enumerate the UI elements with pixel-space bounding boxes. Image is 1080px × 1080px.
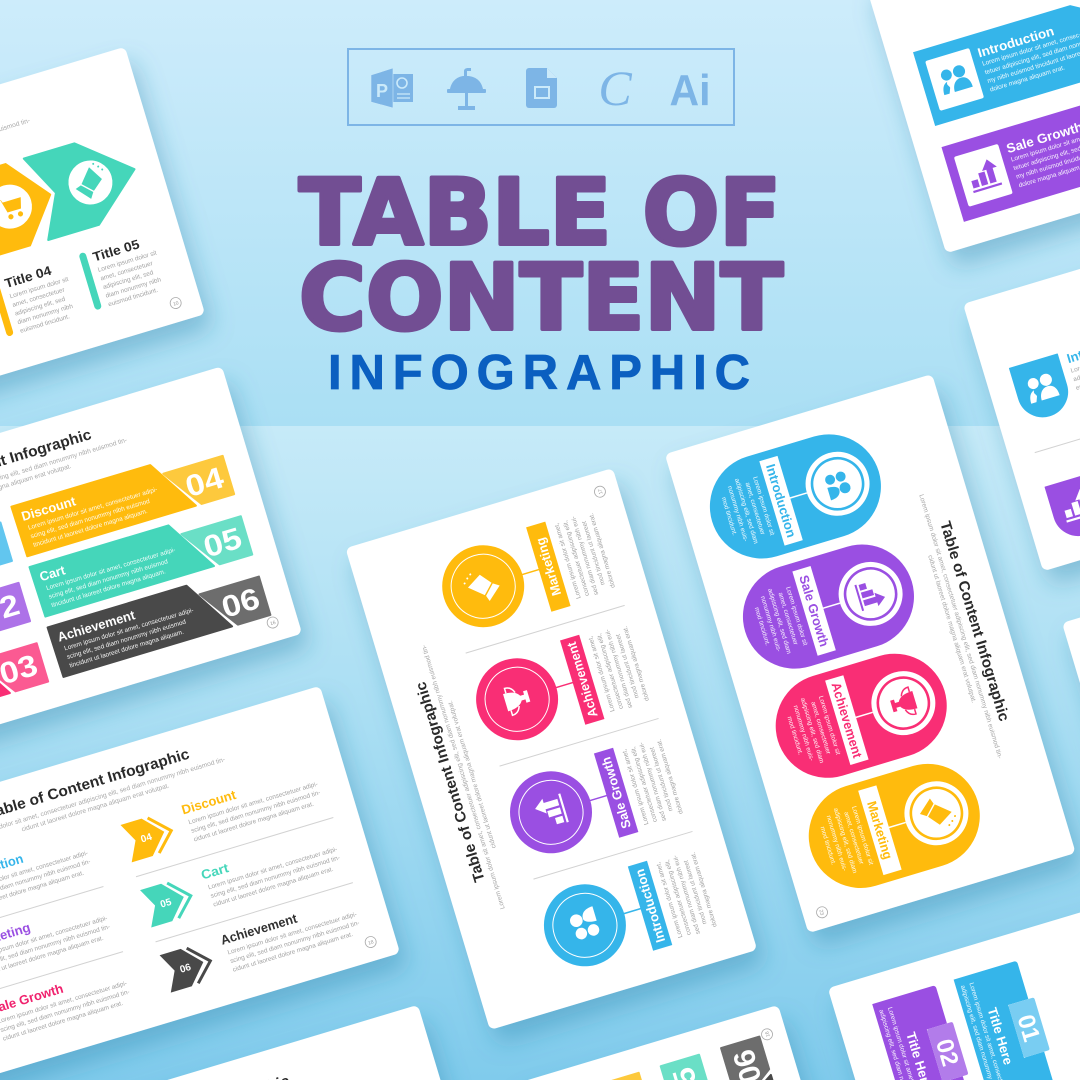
list item: Achievement: cidunt ut laoreet dolore magna aliquam erat. xyxy=(232,931,354,974)
ribbon 05 Cart: Lorem ipsum dolor sit amet, consectetuer adipi- xyxy=(45,547,176,592)
icon strip: software logos xyxy=(348,49,734,125)
item: Marketing: consectetuer adipiscing elit, xyxy=(562,519,591,597)
ribbon 01 xyxy=(0,511,12,623)
pill: Introduction: Introduction xyxy=(763,462,799,539)
list item: Sale Growth: Lorem ipsum dolor sit amet, consectetuer adipi- xyxy=(0,980,128,1025)
pill: Sale Growth: adipiscing elit, sed diam xyxy=(766,588,792,655)
pill: Achievement xyxy=(763,641,959,791)
pill: Introduction: nonummy nibh euis- xyxy=(726,485,749,542)
panel: slide with shield icons xyxy=(963,160,1080,571)
panel: slide with numbered ribbons 04 05 06 xyxy=(0,366,302,777)
ribbon 06 Achievement: 06 xyxy=(218,582,264,625)
item: Achievement: consectetuer adipiscing elit, xyxy=(596,632,625,710)
list item: Cart: scing elit, sed diam nonummy nibh euismod tin- xyxy=(210,855,341,900)
item: Marketing: sed diam nonummy nibh eui- xyxy=(570,515,600,596)
pill: Introduction xyxy=(697,422,894,571)
list item: Discount xyxy=(180,764,324,844)
title: CONTENT xyxy=(299,246,783,351)
heading: Table of Content Infographic xyxy=(413,680,489,884)
ribbon 05 tab xyxy=(661,1055,717,1080)
banner: Sale Growth xyxy=(941,83,1080,222)
pill: Sale Growth: mod tincidunt. xyxy=(753,606,771,647)
text: title 05: euismod tincidunt. xyxy=(107,287,159,308)
list item: Discount: Lorem ipsum dolor sit amet, consectetuer adipi- xyxy=(188,781,319,826)
list item: Sale Growth xyxy=(0,963,133,1044)
icon: Keynote xyxy=(447,68,486,110)
banner: Sale Growth: Sale Growth xyxy=(1005,119,1080,156)
list item: Achievement: Lorem ipsum dolor sit amet, consectetuer adipi- xyxy=(227,911,358,956)
pill: Marketing: nonummy nibh euis- xyxy=(825,815,848,872)
ribbon 06 Achievement: Lorem ipsum dolor sit amet, consectetuer adipi- xyxy=(63,607,194,652)
panel: slide with Introduction and Sale Growth banners xyxy=(866,0,1080,253)
pill: Sale Growth: Lorem ipsum dolor sit xyxy=(784,586,809,647)
item: Achievement: mod tincidunt ut laoreet xyxy=(615,633,641,699)
text: title 05 xyxy=(78,232,168,312)
list item: Discount: Discount xyxy=(180,787,238,817)
chevron 06 xyxy=(160,942,216,993)
icon: megaphone xyxy=(70,161,110,202)
ribbon 05 Cart xyxy=(29,505,252,617)
subtitle: INFOGRAPHIC xyxy=(328,346,750,400)
banner: Introduction: dolore magna aliquam erat. xyxy=(989,64,1066,94)
item: Sale Growth: Sale Growth xyxy=(598,755,634,830)
pill: Achievement: nonummy nibh euis- xyxy=(792,705,815,762)
page number: 23 xyxy=(817,909,825,916)
item: Sale Growth: sed diam nonummy nibh eui- xyxy=(638,741,668,822)
panel: right slide with pills xyxy=(665,374,1076,933)
item: Marketing: mod tincidunt ut laoreet xyxy=(581,520,607,586)
pill: Sale Growth: amet, consectetuer xyxy=(777,592,799,647)
heading: Table of Content Infographic xyxy=(936,519,1012,723)
text: title 04: diam nonummy nibh xyxy=(17,303,74,326)
shield: Introduction xyxy=(1009,329,1080,423)
panel: centre slide with circles xyxy=(345,468,757,1030)
ribbon 06 Achievement xyxy=(48,565,270,677)
ribbon 02 xyxy=(0,571,30,684)
chevron 05 xyxy=(140,877,196,927)
pill: Introduction: adipiscing elit, sed diam xyxy=(733,478,759,545)
icon: people xyxy=(937,63,973,95)
list item: Achievement: scing elit, sed diam nonummy nibh euismod tin- xyxy=(229,920,360,965)
ribbon 04 tab xyxy=(600,1073,657,1080)
banner: Introduction: Lorem ipsum dolor sit amet, consec- xyxy=(981,31,1080,68)
shield: Sale Growth xyxy=(1045,473,1080,542)
panel: bottom right slide with folder cards xyxy=(828,908,1080,1080)
page number: 16 xyxy=(269,620,277,627)
pill: Marketing: mod tincidunt. xyxy=(819,826,837,866)
page number: 16 xyxy=(764,1030,772,1038)
banner: Introduction: Introduction xyxy=(976,23,1056,60)
title xyxy=(299,161,783,351)
banner: Introduction xyxy=(913,0,1080,126)
pill: Achievement: adipiscing elit, sed diam xyxy=(799,697,825,764)
folder card 01: Title Here xyxy=(985,1006,1016,1067)
item: Achievement: sed diam nonummy nibh eui- xyxy=(604,628,634,709)
ribbon 04 Discount: Lorem ipsum dolor sit amet, consectetuer adipi- xyxy=(27,486,158,532)
pill: Sale Growth: nonummy nibh euis- xyxy=(759,595,782,653)
subtitle: Lorem ipsum dolor sit amet, consectetuer adipiscing elit, sed diam nonummy nibh euismod tin- xyxy=(917,494,1003,760)
ribbon 05 Cart: Cart xyxy=(38,562,67,584)
list item: Cart: Cart xyxy=(199,860,231,883)
page number xyxy=(266,616,280,629)
icon: cart xyxy=(0,192,26,222)
icon: PowerPoint xyxy=(371,68,413,108)
pill: Achievement: amet, consectetuer xyxy=(809,701,832,756)
ribbon 04 Discount: scing elit, sed diam nonummy nibh euismod xyxy=(30,498,151,540)
text: title 04: euismod tincidunt. xyxy=(19,313,71,335)
pill: Introduction: mod tincidunt. xyxy=(720,496,738,537)
item: Marketing xyxy=(431,507,618,640)
item: Achievement: Lorem ipsum dolor sit amet, xyxy=(587,635,617,713)
ribbon 06 Achievement: Achievement xyxy=(56,607,137,645)
subtitle: Lorem ipsum dolor sit amet, consectetuer adipiscing elit, sed diam nonummy nibh euismod tin- xyxy=(421,644,507,910)
pill: Marketing: amet, consectetuer xyxy=(842,811,865,866)
subtitle: cidunt ut laoreet dolore magna aliquam erat volutpat. xyxy=(447,699,498,849)
page number: 18 xyxy=(367,939,375,947)
chevron 05: 05 xyxy=(159,897,173,911)
text: title 05: amet, consectetuer xyxy=(100,260,155,282)
page number xyxy=(169,296,183,310)
ribbon 05 Cart: scing elit, sed diam nonummy nibh euismod xyxy=(48,558,169,601)
item: Sale Growth: Lorem ipsum dolor sit amet, xyxy=(621,748,650,826)
icon: trophy xyxy=(888,686,919,720)
ribbon 04 Discount: tincidunt ut laoreet dolore magna aliquam. xyxy=(32,508,149,549)
list item: Achievement: Achievement xyxy=(219,910,299,948)
page number xyxy=(815,905,829,919)
page number xyxy=(364,935,378,949)
panel: slide with chevrons list xyxy=(0,686,400,1080)
arrow shape: teal title 05 xyxy=(24,129,147,240)
item: Marketing: dolore magna aliquam erat. xyxy=(588,512,617,589)
icon: bar chart with arrow xyxy=(533,793,569,830)
list item: Discount: scing elit, sed diam nonummy nibh euismod tin- xyxy=(190,789,321,835)
page number xyxy=(760,1027,774,1041)
pill: Introduction: amet, consectetuer xyxy=(744,482,766,536)
ribbon 03 xyxy=(0,632,48,744)
icon: megaphone xyxy=(461,566,503,607)
panel: bottom left slide, top edge xyxy=(0,1005,498,1080)
icon: PowerPoint: P xyxy=(376,81,388,101)
text: title 05: adipiscing elit, sed xyxy=(102,269,155,291)
text: title 05: Title 05 xyxy=(91,236,141,265)
text: title 04 xyxy=(0,259,80,339)
icon: trophy xyxy=(502,682,533,716)
item: Sale Growth: dolore magna aliquam erat. xyxy=(656,738,685,815)
list item: Discount: cidunt ut laoreet dolore magna aliquam erat. xyxy=(193,801,315,843)
folder card 02 xyxy=(872,983,1019,1080)
pill: Sale Growth: Sale Growth xyxy=(796,573,832,649)
page number xyxy=(593,485,607,499)
title: TABLE OF xyxy=(299,161,781,266)
ribbon 04 Discount xyxy=(11,444,234,557)
item: Introduction: mod tincidunt ut laoreet xyxy=(683,859,708,925)
list item: Cart xyxy=(199,829,343,909)
list item: Introduction xyxy=(0,832,94,913)
icon: people xyxy=(824,470,853,500)
text: title 04: Lorem ipsum dolor sit xyxy=(9,276,70,300)
item: Achievement xyxy=(465,620,652,753)
pill: Marketing: Lorem ipsum dolor sit xyxy=(850,805,874,866)
item: Sale Growth xyxy=(499,733,686,866)
item: Introduction: Lorem ipsum dolor sit amet, xyxy=(655,861,684,939)
chevron 04: 04 xyxy=(140,832,154,845)
text: title 04: Title 04 xyxy=(3,263,54,291)
panel: slide with chevrons list: cidunt ut laoreet dolore magna aliquam erat volutpat. xyxy=(21,782,170,833)
panel: bottom centre slide, rotated ribbons xyxy=(511,1005,922,1080)
panel: slide with title 04 and title 05 arrows xyxy=(0,47,205,458)
ribbon 05 Cart: 05 xyxy=(200,522,246,564)
item: Introduction xyxy=(533,846,720,979)
icon: megaphone xyxy=(916,793,958,833)
icon: bar chart with arrow xyxy=(966,157,1002,193)
pill: Achievement: Lorem ipsum dolor sit xyxy=(817,695,841,756)
chevron 06: 06 xyxy=(179,962,193,976)
item: Achievement: Achievement xyxy=(564,640,601,719)
text: title 05: diam nonummy nibh xyxy=(105,276,162,300)
panel: blank edge slide on right xyxy=(1062,479,1080,890)
icon: people xyxy=(1024,371,1060,404)
page number: 10 xyxy=(172,300,180,308)
item: Marketing: Marketing xyxy=(533,536,564,598)
pill: Marketing: adipiscing elit, sed diam xyxy=(832,807,858,874)
item: Sale Growth: mod tincidunt ut laoreet xyxy=(649,746,675,812)
pill: Sale Growth xyxy=(730,532,927,681)
item: Achievement: dolore magna aliquam erat. xyxy=(622,625,651,702)
list item: Sale Growth: scing elit, sed diam nonummy nibh euismod tin- xyxy=(0,989,130,1034)
pill: Marketing xyxy=(796,751,993,901)
list item: Cart: cidunt ut laoreet dolore magna aliquam erat. xyxy=(212,866,334,909)
icon: bar chart with arrow xyxy=(854,578,887,611)
list item: Achievement xyxy=(219,894,363,975)
ribbon 06 Achievement: tincidunt ut laoreet dolore magna aliquam. xyxy=(69,629,185,670)
pill: Achievement: mod tincidunt. xyxy=(786,716,804,756)
icon: Google Slides xyxy=(526,68,557,108)
text: title 05: Lorem ipsum dolor sit xyxy=(97,250,158,274)
list item: Marketing xyxy=(0,898,114,979)
icon: Canva: C xyxy=(598,60,632,116)
folder card 01 xyxy=(954,959,1080,1080)
chevron 04 xyxy=(120,811,177,862)
arrow shape: yellow title 04 xyxy=(0,154,63,269)
ribbon 04 Discount: Discount xyxy=(20,493,78,524)
item: Sale Growth: consectetuer adipiscing elit, xyxy=(630,745,659,823)
text: title 04: amet, consectetuer xyxy=(12,286,66,309)
ribbon 04 Discount: 04 xyxy=(182,461,228,504)
folder card 01: adipiscing elit, sed diam nonummy xyxy=(959,984,994,1080)
icon: bar chart xyxy=(1059,487,1080,523)
item: Marketing: Lorem ipsum dolor sit amet, xyxy=(553,522,583,600)
item: Introduction: Introduction xyxy=(632,867,668,944)
folder card 02: 02 xyxy=(930,1036,964,1069)
item: Introduction: sed diam nonummy nibh eui- xyxy=(672,854,702,935)
ribbon 06 Achievement: scing elit, sed diam nonummy nibh euismod xyxy=(66,618,187,661)
icon: people xyxy=(568,906,601,941)
item: Introduction: dolore magna aliquam erat. xyxy=(690,851,719,928)
icon: Illustrator: Ai xyxy=(670,66,710,115)
pill: Marketing: Marketing xyxy=(864,799,896,861)
text: title 04: adipiscing elit, sed xyxy=(14,296,67,318)
pill: Achievement: Achievement xyxy=(828,681,865,760)
list item: Cart: Lorem ipsum dolor sit amet, consectetuer adipi- xyxy=(207,846,338,891)
ribbon 05 Cart: tincidunt ut laoreet dolore magna aliquam. xyxy=(51,568,167,609)
pill: Introduction: Lorem ipsum dolor sit xyxy=(751,476,776,537)
folder card 01: 01 xyxy=(1011,1012,1045,1045)
item: Introduction: consectetuer adipiscing elit, xyxy=(664,858,693,936)
list item: Sale Growth: cidunt ut laoreet dolore magna aliquam erat. xyxy=(2,1000,124,1043)
ribbon 06 tab xyxy=(710,1037,822,1080)
page number: 17 xyxy=(597,488,605,495)
subtitle: cidunt ut laoreet dolore magna aliquam erat volutpat. xyxy=(926,554,977,704)
